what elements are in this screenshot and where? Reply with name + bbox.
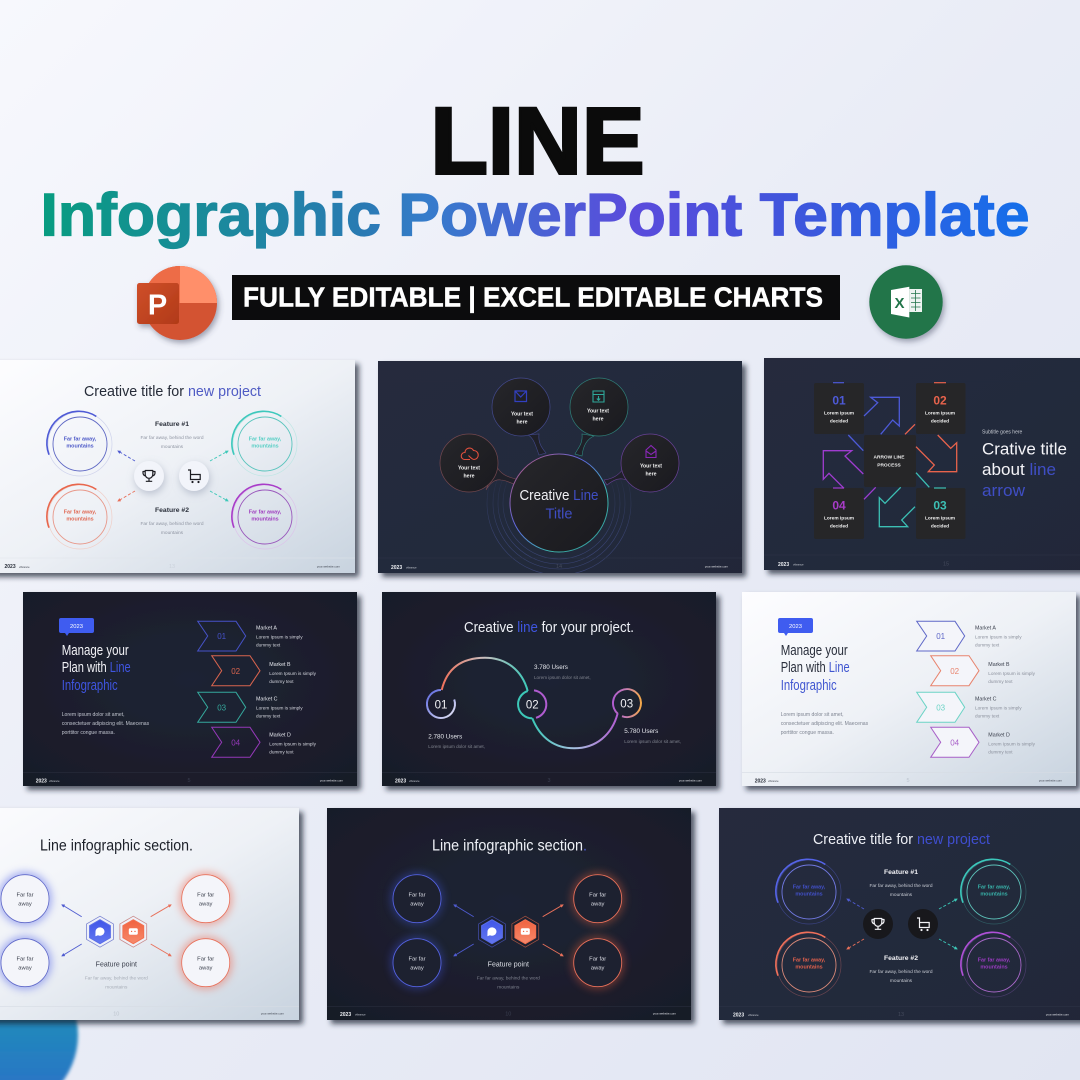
central circle with title: Creative Line (520, 487, 598, 504)
center card label (874, 454, 905, 468)
heading: Plan with Line (781, 660, 850, 676)
footer (382, 773, 716, 784)
footer (327, 1007, 691, 1018)
arrow: blue (848, 397, 899, 451)
card 01: 01 (832, 394, 846, 408)
chevron 04: 04 (950, 738, 960, 748)
bubble: cloud: Your text (458, 466, 480, 472)
node 03 (613, 689, 641, 717)
central circle with title (510, 454, 608, 552)
market labels: dummy text (988, 750, 1013, 754)
heading: Infographic (781, 678, 837, 694)
footer: 2023 (778, 562, 789, 568)
ring: teal: mountains (980, 892, 1008, 898)
stat: 3.780 users: 3.780 Users (534, 664, 568, 671)
bubble: cloud: here (464, 474, 475, 480)
panel: slide 13 light, creative title (0, 360, 355, 573)
card 04 (824, 488, 854, 530)
chevron 03 (917, 692, 965, 722)
icon: trophy (134, 461, 164, 491)
footer (378, 558, 742, 571)
icon: Excel logo (869, 265, 943, 339)
footer: 15 (943, 562, 949, 568)
heading: Creative title for new project (813, 831, 991, 848)
feature point text: mountains (497, 984, 520, 990)
chevron 02: 02 (231, 667, 241, 676)
market labels: Lorem Ipsum is simply (988, 742, 1036, 746)
footer: 2023 (36, 778, 47, 784)
slide background (742, 592, 1076, 786)
slide background (764, 358, 1080, 570)
ring: coral: mountains (795, 964, 823, 970)
chevron 02 (931, 656, 979, 686)
heading: Line infographic section. (432, 838, 587, 855)
stat: 2.780 users (428, 734, 485, 749)
ring: purple: mountains (980, 964, 1008, 970)
footer: 2023 (395, 778, 406, 784)
feature 2 text: mountains (890, 978, 913, 984)
footer: your.website.com (705, 564, 728, 568)
glowing circles: blue: Far far (408, 893, 426, 899)
feature 2 text: Far far away, behind the word (869, 969, 933, 975)
footer: 13 (898, 1012, 904, 1018)
market labels: Lorem Ipsum is simply (269, 742, 317, 746)
ring: teal: mountains (251, 444, 279, 450)
paragraph (62, 712, 150, 736)
market labels: Market A (256, 626, 277, 632)
market labels: Market C (256, 696, 278, 702)
market labels: dummy text (256, 642, 281, 648)
bubble: house mail: here (646, 472, 657, 478)
central circle with title: Title (546, 506, 572, 522)
icon: trophy (863, 909, 893, 939)
node 02 (518, 690, 546, 718)
ring: coral: Far far away, (64, 510, 97, 516)
market labels: dummy text (975, 642, 1000, 648)
panel: slide dark, creative line for your project (382, 592, 716, 786)
side heading: Subtitle goes here (982, 430, 1023, 436)
footer: your.website.com (1046, 1012, 1069, 1016)
slide background (327, 808, 691, 1020)
footer: 5 (906, 778, 910, 784)
ring: coral: Far far away, (793, 958, 826, 964)
card 02: decided (931, 418, 949, 424)
node 03: 03 (620, 698, 633, 710)
center card label: ARROW LINE (874, 454, 905, 460)
icon: Excel logo: X (894, 295, 905, 312)
card 02: Lorem Ipsum (925, 410, 955, 416)
footer: vibrance (748, 1013, 759, 1017)
footer: 10 (113, 1011, 119, 1017)
icon: cart (179, 461, 209, 491)
node 01 (427, 690, 455, 718)
footer: your.website.com (320, 778, 343, 782)
footer (764, 555, 1080, 568)
card 03 (925, 488, 955, 530)
footer: 2023 (391, 565, 402, 571)
side heading: Crative title (982, 440, 1067, 458)
glowing circles: blue: away (410, 965, 424, 971)
node 02: 02 (526, 700, 539, 712)
footer: 2023 (733, 1012, 744, 1018)
market labels: dummy text (975, 714, 1000, 718)
feature point text: Feature point (96, 961, 137, 968)
paragraph: Lorem ipsum dolor sit amet, (781, 712, 844, 718)
heading: Manage your (781, 643, 848, 659)
stat: 3.780 users (534, 664, 591, 680)
ring: blue: mountains (795, 892, 823, 898)
feature point text (85, 961, 148, 990)
ring: blue (776, 859, 841, 924)
paragraph: consectetuer adipiscing elit. Maecenas (62, 721, 150, 727)
footer: 2023 (340, 1012, 351, 1018)
footer: 2023 (4, 564, 16, 570)
bubble: cloud (440, 434, 498, 492)
side heading: about line (982, 461, 1056, 479)
market labels: Lorem Ipsum is simply (269, 671, 317, 676)
heading: Infographic (62, 678, 118, 694)
arrows: dashed (847, 899, 957, 949)
bubble: mail (492, 378, 550, 436)
heading: Creative title for new project (84, 383, 262, 400)
card 03: 03 (933, 498, 947, 512)
market labels: dummy text (988, 679, 1013, 684)
footer: 2023 (755, 778, 766, 784)
market labels: Market B (269, 662, 291, 668)
center card label: PROCESS (877, 462, 902, 468)
icon: PowerPoint logo: P (148, 290, 167, 322)
chevron 04 (212, 727, 260, 757)
card 02: 02 (933, 394, 947, 408)
year bubble (778, 618, 813, 636)
subtitle: Infographic PowerPoint Template: Infographic PowerPoint Template (40, 182, 1030, 248)
footer: 13 (169, 564, 175, 570)
ring: teal: Far far away, (249, 436, 282, 442)
heading: Manage your (62, 643, 129, 659)
market labels (256, 626, 317, 754)
slide background (0, 360, 355, 573)
arrows (454, 905, 563, 956)
paragraph: Lorem ipsum dolor sit amet, (62, 712, 125, 718)
node 01: 01 (435, 700, 447, 712)
card 04: 04 (832, 498, 846, 512)
feature 2 text: Feature #2 (155, 507, 189, 514)
side heading (982, 430, 1067, 500)
bubble: house mail: Your text (640, 464, 662, 470)
paragraph: consectetuer adipiscing elit. Maecenas (781, 721, 869, 727)
card 04: decided (830, 524, 848, 530)
slide background (378, 361, 742, 573)
market labels: dummy text (256, 714, 281, 718)
ring: coral (47, 484, 112, 549)
chevron 01 (917, 621, 965, 651)
market labels: Market D (988, 732, 1010, 738)
feature 1 text: Far far away, behind the word (869, 883, 933, 889)
connector necks (486, 434, 635, 490)
chevron 03: 03 (217, 704, 227, 713)
side heading: arrow (982, 482, 1025, 500)
footer: 5 (187, 778, 191, 784)
ring: purple: Far far away, (978, 958, 1011, 964)
footer: 3 (547, 778, 551, 784)
panel: slide 15 dark, arrow line process (764, 358, 1080, 570)
feature 2 text: mountains (161, 530, 184, 536)
ring: blue: mountains (66, 444, 94, 450)
arrows (62, 905, 171, 956)
chevron 03 (198, 692, 246, 722)
glowing circles: coral: away (199, 965, 213, 971)
market labels: Market A (975, 626, 996, 632)
bubble: download: here (593, 416, 604, 422)
bubble: mail: Your text (511, 412, 533, 418)
icon: PowerPoint logo (137, 266, 217, 340)
heading: Plan with Line (62, 660, 131, 676)
glowing circles: coral: Far far (589, 893, 606, 899)
arrows: dashed (118, 451, 228, 501)
footer: your.website.com (1039, 778, 1062, 782)
glowing circles: blue: Far far (408, 957, 426, 963)
footer (23, 773, 357, 784)
feature 1 text: Feature #1 (155, 421, 189, 428)
feature 2 text (869, 955, 933, 984)
arrow: purple (823, 451, 876, 499)
footer (742, 773, 1076, 784)
ring: purple (232, 484, 297, 549)
card 01: decided (830, 418, 848, 424)
paragraph (781, 712, 869, 736)
glowing circles: blue (0, 872, 52, 990)
market labels: dummy text (269, 750, 294, 754)
ring: purple: mountains (251, 516, 279, 522)
footer: vibrance (355, 1012, 366, 1016)
decorative blue blob (0, 957, 78, 1080)
stat: 2.780 users: 2.780 Users (428, 734, 462, 740)
market labels: Lorem Ipsum is simply (256, 634, 303, 640)
chevron 01: 01 (936, 632, 946, 641)
glowing circles: coral: Far far (197, 957, 214, 963)
ring: teal: Far far away, (978, 884, 1011, 890)
glowing circles: coral (571, 872, 625, 990)
glowing circles: blue: Far far (16, 893, 34, 899)
chevron 02 (212, 656, 260, 686)
market labels: Lorem Ipsum is simply (975, 706, 1022, 710)
market labels: Lorem Ipsum is simply (988, 671, 1036, 676)
stat: 5.780 users: 5.780 Users (624, 728, 658, 735)
stat: 5.780 users: Lorem ipsum dolor sit amet, (624, 739, 681, 744)
feature point text: Far far away, behind the word (85, 976, 148, 982)
year bubble (59, 618, 94, 636)
glowing circles: coral: Far far (197, 893, 214, 899)
stat: 2.780 users: Lorem ipsum dolor sit amet, (428, 744, 485, 749)
ring: coral (776, 932, 841, 997)
card 04: Lorem Ipsum (824, 516, 854, 522)
arrow: teal (879, 473, 929, 527)
market labels: Market D (269, 732, 291, 738)
banner: fully editable: FULLY EDITABLE | EXCEL EDITABLE CHARTS (243, 282, 823, 312)
glowing circles: blue: Far far (16, 957, 34, 963)
footer: vibrance (406, 566, 417, 570)
panel: slide 5 light, manage your plan (742, 592, 1076, 786)
ring: blue: Far far away, (64, 436, 97, 442)
market labels: Market C (975, 696, 997, 702)
feature 2 text: Far far away, behind the word (140, 521, 204, 527)
market labels: Lorem Ipsum is simply (975, 634, 1022, 640)
glowing circles: coral: away (199, 901, 213, 907)
footer: vibrance (19, 565, 30, 569)
bubble: mail: here (517, 420, 528, 426)
panel: slide 10 dark, line infographic section (327, 808, 691, 1020)
year bubble: 2023 (70, 624, 83, 630)
market labels: Lorem Ipsum is simply (256, 706, 303, 710)
market labels: Market B (988, 662, 1010, 668)
chevron 04: 04 (231, 738, 241, 748)
icon: blue hexagon (479, 916, 505, 947)
chevron 04 (931, 727, 979, 757)
icon: coral hexagon (512, 916, 539, 947)
heading: Line infographic section. (40, 838, 193, 855)
feature 1 text (140, 421, 204, 450)
bubble: house mail (621, 434, 679, 492)
card 01: Lorem Ipsum (824, 410, 854, 416)
feature 2 text (140, 507, 204, 536)
glowing circles: blue: away (410, 901, 424, 907)
footer: vibrance (793, 562, 804, 566)
heading (62, 643, 131, 694)
chevron 03: 03 (936, 704, 946, 713)
ring: blue: Far far away, (793, 884, 826, 890)
glowing circles: coral (179, 872, 233, 990)
ring: coral: mountains (66, 516, 94, 522)
card 01 (824, 383, 854, 424)
footer: your.website.com (679, 778, 702, 782)
card 03: Lorem Ipsum (925, 516, 955, 522)
slide background (719, 808, 1080, 1020)
bubble: download: Your text (587, 408, 609, 414)
footer: vibrance (409, 779, 420, 783)
feature 1 text: Feature #1 (884, 869, 918, 876)
feature point text: mountains (105, 984, 128, 990)
icon: cart (908, 909, 938, 939)
bubble: download (570, 378, 628, 436)
feature 1 text: mountains (890, 892, 913, 898)
footer: vibrance (49, 779, 60, 783)
ring: purple: Far far away, (249, 510, 282, 516)
curve: 02 to 03 (532, 713, 618, 748)
heading (781, 643, 850, 694)
feature point text: Far far away, behind the word (477, 976, 540, 982)
market labels: dummy text (269, 679, 294, 684)
footer: your.website.com (317, 564, 340, 568)
glowing circles: blue (390, 872, 444, 990)
heading: Creative line for your project. (464, 619, 634, 636)
curve: 01 to 02 (442, 658, 528, 691)
footer: your.website.com (261, 1011, 284, 1015)
year bubble: 2023 (789, 624, 802, 630)
title: LINE: LINE (430, 88, 644, 194)
ring: purple (961, 932, 1026, 997)
ring: blue (47, 411, 112, 476)
process cards (814, 383, 966, 539)
chevron 01: 01 (217, 632, 227, 641)
arrow: coral (905, 424, 957, 472)
card 02 (925, 383, 955, 424)
paragraph: porttitor congue massa. (62, 730, 115, 736)
stat: 3.780 users: Lorem ipsum dolor sit amet, (534, 675, 591, 680)
panel: slide 10 light, line infographic section (0, 808, 299, 1020)
ring: teal (232, 411, 297, 476)
icon: blue hexagon (87, 916, 113, 947)
feature 2 text: Feature #2 (884, 955, 918, 962)
paragraph: porttitor congue massa. (781, 730, 834, 736)
concentric rings (486, 480, 632, 573)
slide background (23, 592, 357, 786)
market labels (975, 626, 1036, 754)
slide background (0, 808, 299, 1020)
panel: slide 5 dark, manage your plan (23, 592, 357, 786)
footer: your.website.com (653, 1011, 676, 1015)
panel: slide 14 dark, creative line title (378, 361, 742, 575)
slide background (382, 592, 716, 786)
footer (0, 558, 355, 570)
glowing circles: coral: away (591, 965, 605, 971)
glowing circles: blue: away (18, 965, 32, 971)
feature point text: Feature point (488, 961, 529, 968)
feature 1 text: Far far away, behind the word (140, 435, 204, 441)
chevron 01 (198, 621, 246, 651)
panel: slide 13 dark, creative title (719, 808, 1080, 1020)
glowing circles: coral: Far far (589, 957, 606, 963)
stat: 5.780 users (624, 728, 681, 744)
footer: 10 (505, 1011, 511, 1017)
glowing circles: coral: away (591, 901, 605, 907)
feature 1 text: mountains (161, 444, 184, 450)
chevron 02: 02 (950, 667, 960, 676)
icon: coral hexagon (120, 916, 147, 947)
footer: 14 (556, 564, 562, 570)
footer: vibrance (768, 779, 779, 783)
card 03: decided (931, 524, 949, 530)
footer (0, 1007, 299, 1017)
feature point text (477, 961, 540, 990)
footer (719, 1006, 1080, 1018)
ring: teal (961, 859, 1026, 924)
feature 1 text (869, 869, 933, 898)
banner: fully editable (232, 275, 840, 320)
glowing circles: blue: away (18, 901, 32, 907)
